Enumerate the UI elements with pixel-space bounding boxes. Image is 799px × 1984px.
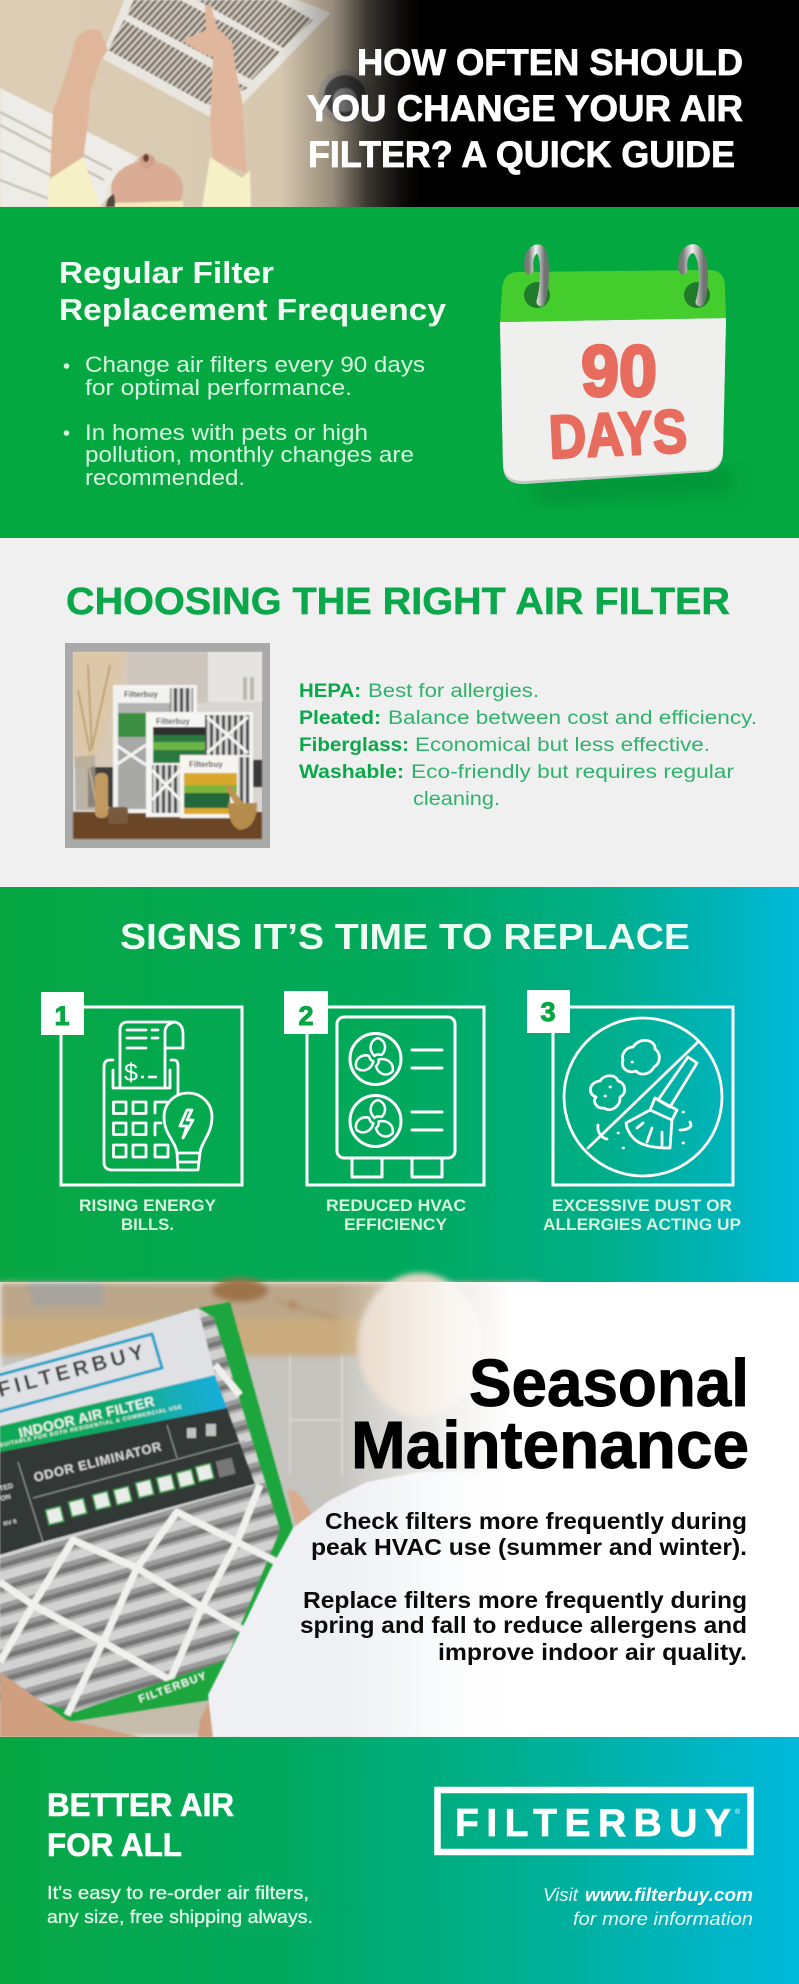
filter types list: Fiberglass:: [299, 735, 409, 756]
heading: CHOOSING THE RIGHT AIR FILTER: [66, 581, 730, 623]
sign 3: excessive dust or allergies: [527, 990, 741, 1234]
label: [543, 1196, 741, 1234]
filter types list: Washable:: [299, 762, 404, 783]
icon: 90 days calendar: DAYS: [547, 397, 688, 471]
bullet list: recommended.: [85, 465, 245, 490]
photo: filter products on a table: [65, 643, 270, 848]
filter lattice: [0, 1365, 277, 1715]
body text: peak HVAC use (summer and winter).: [311, 1534, 747, 1560]
sign 2: reduced HVAC efficiency: 2: [298, 1001, 314, 1031]
heading: [59, 255, 447, 327]
filter types list: Economical but less effective.: [415, 735, 710, 756]
air filter: SUITABLE FOR BOTH RESIDENTIAL & COMMERCIAL USE: [0, 1404, 183, 1449]
sign 2: reduced HVAC efficiency: [284, 991, 484, 1234]
air filter: [0, 1302, 296, 1722]
tagline: any size, free shipping always.: [47, 1907, 313, 1927]
sign 3: excessive dust or allergies: 3: [540, 997, 556, 1027]
air filter: FILTERBUY: [137, 1670, 208, 1706]
air filter: ODOR ELIMINATOR: [32, 1439, 163, 1485]
photo: person reaching up to ceiling vent: [0, 0, 372, 217]
photo: man holding a filterbuy air filter: [0, 1273, 799, 1737]
filter types list: [299, 681, 757, 810]
icon: 90 days calendar: [500, 249, 735, 505]
heading: Seasonal: [469, 1346, 749, 1421]
filter types list: Balance between cost and efficiency.: [388, 708, 757, 729]
body text: improve indoor air quality.: [438, 1639, 747, 1665]
bullet list: pollution, monthly changes are: [85, 442, 414, 467]
man's hands and shirt: [0, 1472, 600, 1737]
panel: signs it's time to replace: [0, 887, 799, 1282]
bullet list: [64, 352, 425, 490]
filter types list: HEPA:: [299, 681, 361, 702]
heading: Regular Filter: [59, 255, 274, 290]
photo: filter products on a table: Filterbuy: [189, 760, 223, 769]
sign 1: rising energy bills: [41, 992, 242, 1234]
bullet list: In homes with pets or high: [85, 420, 368, 445]
air filter: INDOOR AIR FILTER: [17, 1393, 156, 1441]
panel: footer: [0, 1737, 799, 1984]
heading: Replacement Frequency: [59, 292, 447, 327]
body text: [300, 1508, 747, 1665]
bullet list: Change air filters every 90 days: [85, 352, 425, 377]
photo: filter products on a table: Filterbuy: [156, 717, 190, 726]
filter label: [0, 1308, 215, 1428]
tagline: It's easy to re-order air filters,: [47, 1883, 309, 1903]
filter types list: cleaning.: [413, 789, 500, 810]
title: [307, 42, 743, 175]
website note: Visit: [543, 1885, 579, 1905]
title: YOU CHANGE YOUR AIR: [307, 88, 743, 129]
panel: header: [0, 0, 799, 217]
sign 1: rising energy bills: 1: [54, 1001, 70, 1031]
slogan: [47, 1787, 234, 1863]
tagline: [47, 1883, 313, 1927]
label: REDUCED HVAC: [326, 1196, 466, 1215]
heading: SIGNS IT’S TIME TO REPLACE: [120, 916, 690, 957]
website note: www.filterbuy.com: [585, 1885, 753, 1905]
icon: receipt, calculator and light bulb: [104, 1022, 212, 1170]
air filter: RV 8: [3, 1519, 18, 1528]
label: [79, 1196, 217, 1234]
panel: choosing the right air filter: [0, 538, 799, 887]
website note: [543, 1885, 753, 1929]
filter types list: Eco-friendly but requires regular: [411, 762, 735, 783]
panel: seasonal maintenance: [0, 1273, 799, 1737]
logo: filterbuy: [438, 1790, 750, 1852]
label: [326, 1196, 466, 1234]
panel: regular filter replacement frequency: [0, 207, 799, 538]
photo: filter products on a table: Filterbuy: [124, 690, 158, 699]
heading: [351, 1346, 749, 1483]
logo: filterbuy: FILTERBUY: [455, 1802, 731, 1845]
bullet list: for optimal performance.: [85, 375, 352, 400]
icon: hvac unit: [337, 1017, 455, 1177]
label: EFFICIENCY: [344, 1215, 448, 1234]
icon: 90 days calendar: 90: [581, 332, 657, 412]
label: EXCESSIVE DUST OR: [552, 1196, 732, 1215]
website note: for more information: [573, 1909, 753, 1929]
filter types list: Pleated:: [299, 708, 381, 729]
label: RISING ENERGY: [79, 1196, 217, 1215]
heading: Maintenance: [351, 1408, 749, 1483]
body text: Replace filters more frequently during: [303, 1587, 747, 1613]
icon detail: dollar amount: [124, 1059, 157, 1087]
label: ALLERGIES ACTING UP: [543, 1215, 741, 1234]
slogan: BETTER AIR: [47, 1787, 234, 1823]
slogan: FOR ALL: [47, 1827, 182, 1863]
title: FILTER? A QUICK GUIDE: [308, 134, 735, 175]
logo: filterbuy: ®: [735, 1808, 741, 1816]
icon: no dust, broom: [564, 1018, 722, 1176]
label: BILLS.: [121, 1215, 174, 1234]
body text: Check filters more frequently during: [325, 1508, 747, 1534]
air filter: ON: [0, 1494, 12, 1503]
body text: spring and fall to reduce allergens and: [300, 1612, 747, 1638]
filter types list: Best for allergies.: [368, 681, 539, 702]
title: HOW OFTEN SHOULD: [357, 42, 743, 83]
icon detail: dollar amount: $: [124, 1059, 138, 1087]
